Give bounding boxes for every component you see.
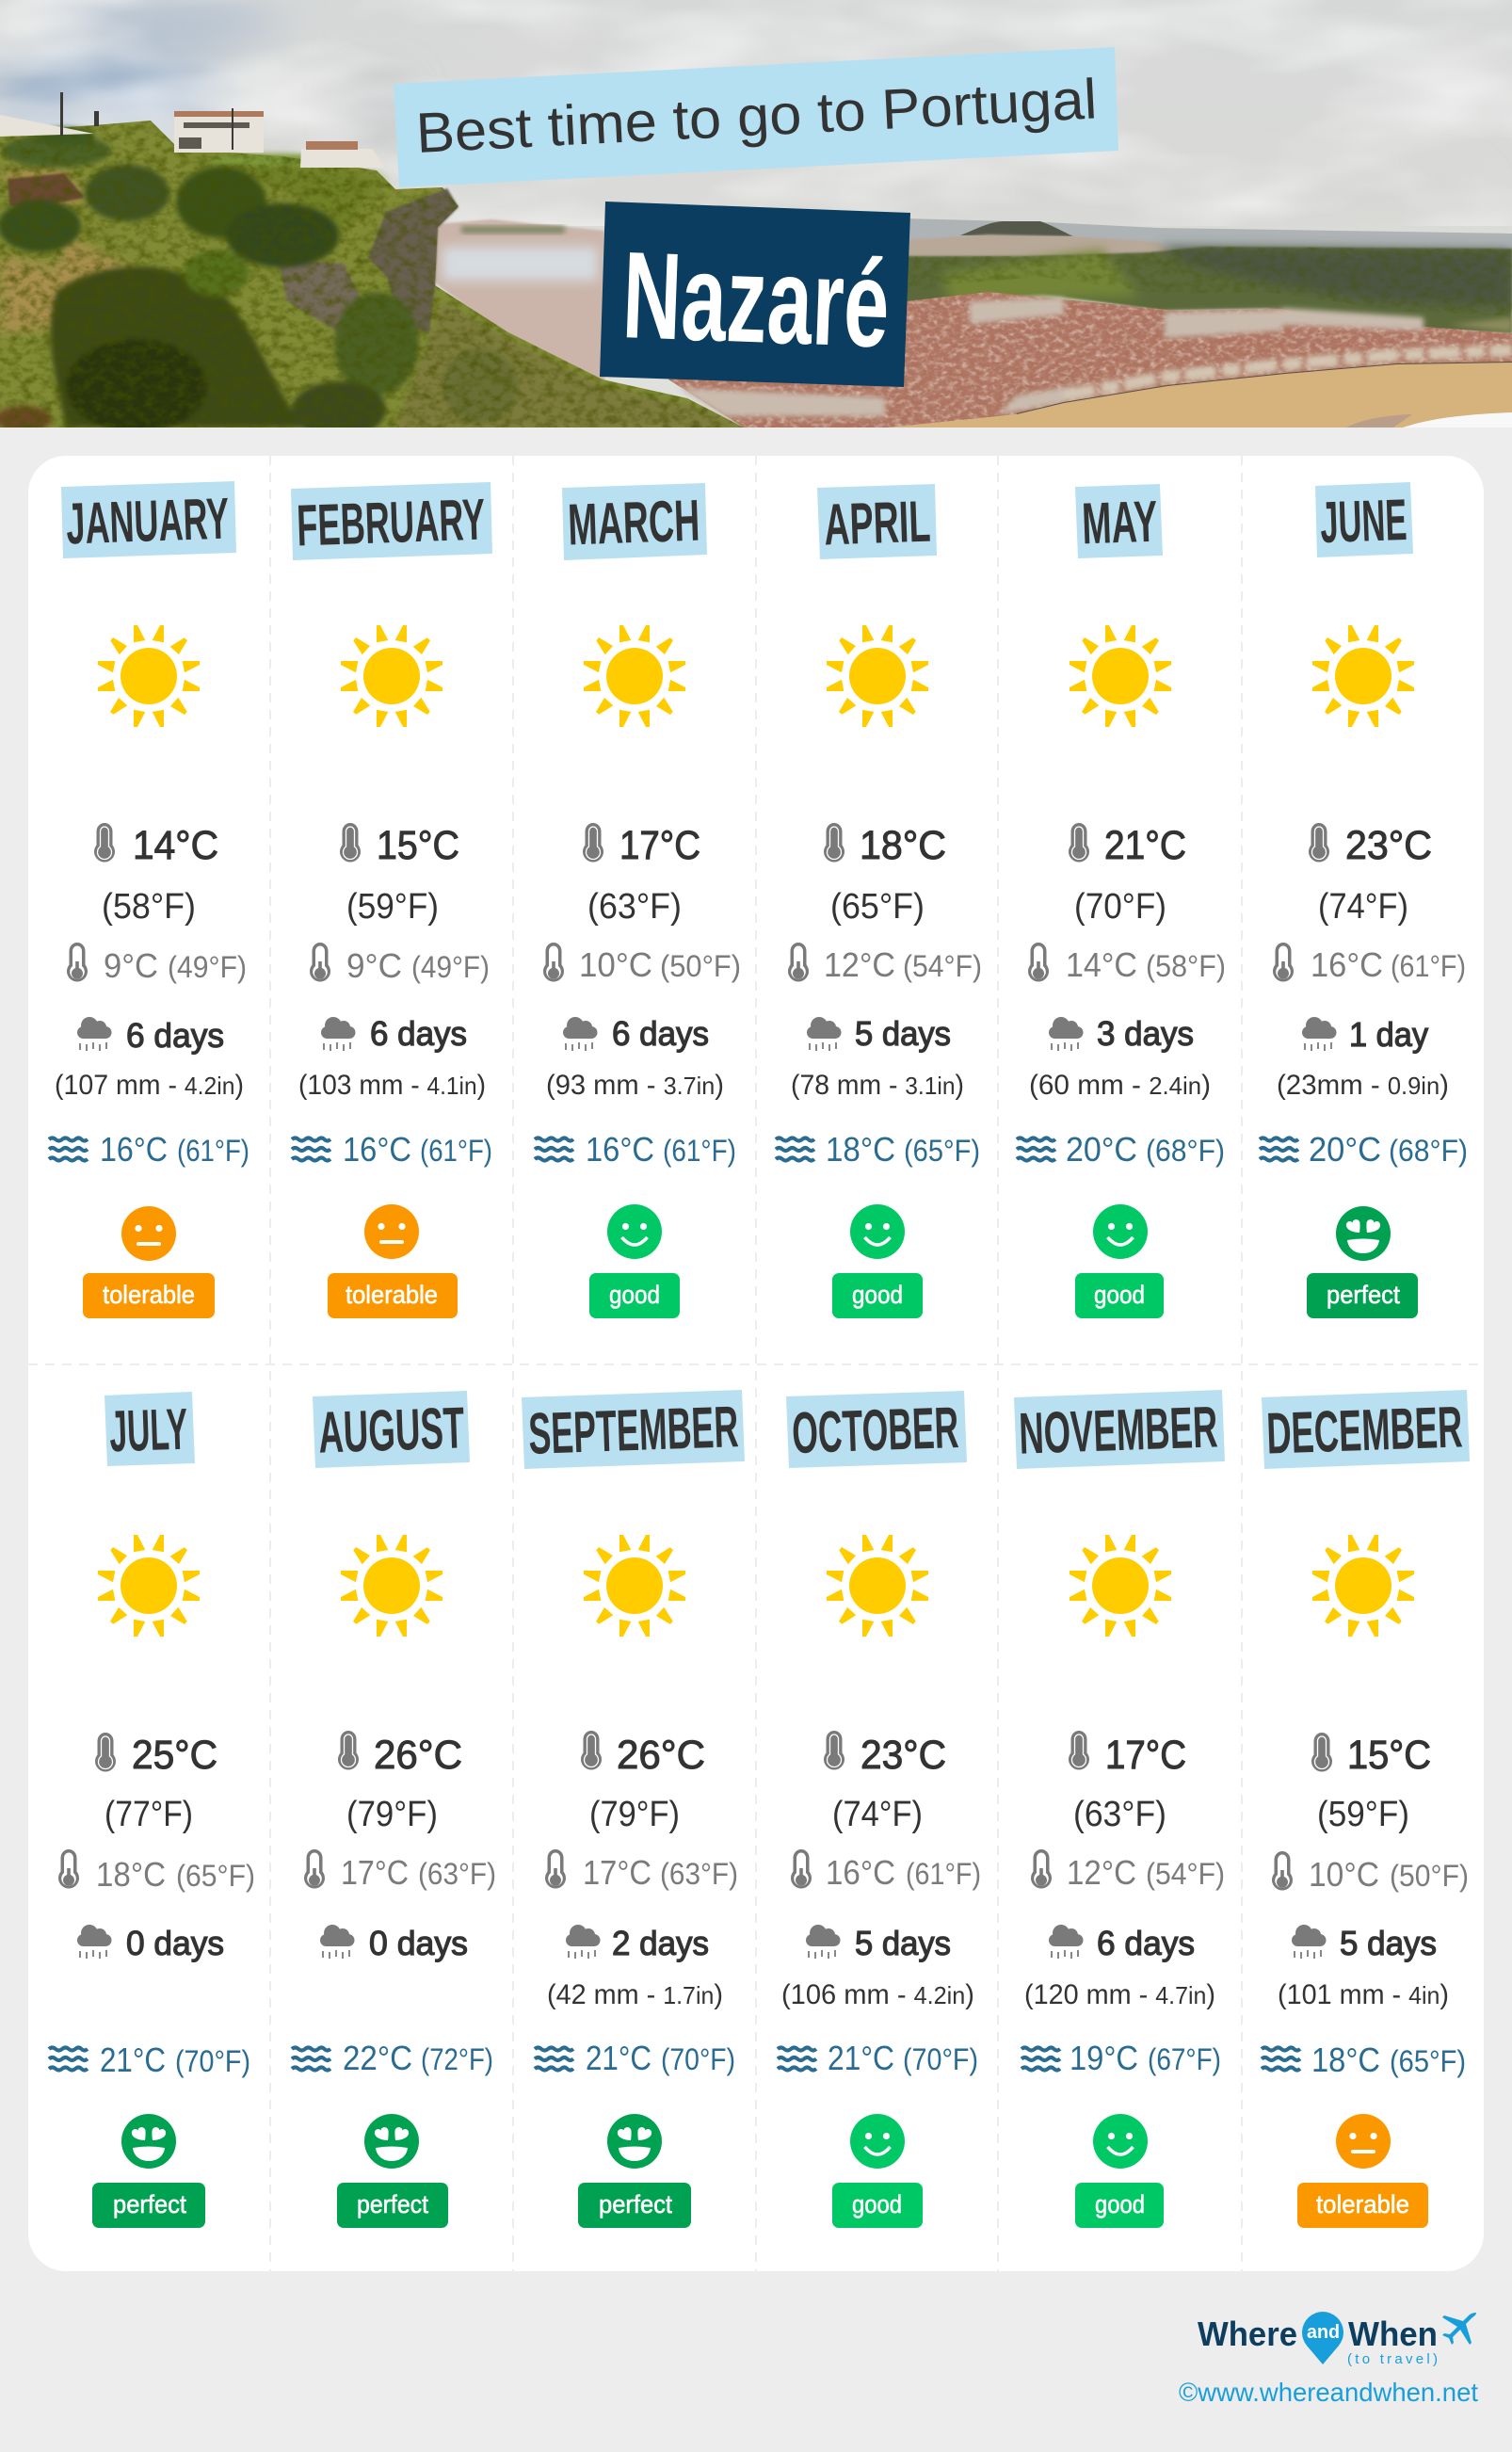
rating badge: tolerable: [328, 1273, 458, 1318]
icon: smiling face: [1093, 2114, 1148, 2169]
rainy days: 1 day: [1349, 1015, 1428, 1054]
rainfall: (78 mm - 3.1in): [791, 1070, 964, 1101]
icon: sun: [827, 1535, 928, 1637]
low temperature: 9°C: [104, 946, 158, 985]
high temperature fahrenheit: (79°F): [346, 1795, 438, 1834]
rainfall: (60 mm - 2.4in): [1029, 1070, 1211, 1101]
sea temperature: 16°C: [343, 1130, 411, 1169]
rainfall: (120 mm - 4.7in): [1024, 1979, 1215, 2010]
icon: thermometer low: [1031, 1849, 1052, 1888]
icon: sea waves: [535, 2047, 573, 2070]
icon: rain cloud: [1302, 1017, 1337, 1051]
month: August: [292, 1391, 496, 2228]
sea temperature: 16°C: [100, 1130, 168, 1169]
icon: rain cloud: [1292, 1925, 1326, 1959]
sea temperature: 21°C: [586, 2039, 651, 2077]
icon: thermometer low: [1273, 943, 1294, 981]
icon: thermometer high: [1069, 1731, 1089, 1769]
low temperature fahrenheit: (54°F): [903, 949, 982, 983]
icon: sea waves: [1260, 1137, 1298, 1160]
low temperature: 16°C: [1311, 945, 1383, 984]
month: September: [522, 1390, 745, 2228]
high temperature: 21°C: [1104, 823, 1186, 868]
rating badge: perfect: perfect: [599, 2190, 672, 2218]
icon: thermometer high: [94, 823, 115, 862]
low temperature fahrenheit: (65°F): [176, 1859, 255, 1893]
logo: Where and When (to travel): Where: [1198, 2315, 1297, 2353]
rating badge: tolerable: [83, 1273, 215, 1318]
low temperature: 18°C: [96, 1855, 166, 1894]
rating badge: tolerable: [1297, 2183, 1428, 2228]
logo: Where and When (to travel): When: [1348, 2315, 1438, 2353]
high temperature: 26°C: [374, 1733, 462, 1778]
title banner: Best time to go to Portugal: [394, 47, 1118, 187]
heading: September: [522, 1390, 745, 1469]
icon: thermometer high: [340, 823, 361, 862]
month: February: [291, 482, 492, 1318]
icon: rain cloud: [1049, 1017, 1083, 1051]
icon: sun: [98, 625, 200, 727]
icon: thermometer high: [1311, 1733, 1332, 1771]
icon: thermometer low: [67, 943, 88, 981]
rainfall: (107 mm - 4.2in): [55, 1070, 244, 1101]
rainfall: (93 mm - 3.7in): [546, 1070, 724, 1101]
icon: sea waves: [776, 1137, 814, 1160]
heading: April: [817, 484, 937, 559]
low temperature: 9°C: [346, 946, 402, 985]
high temperature: 17°C: [619, 823, 700, 868]
vegetation mottling: [0, 121, 744, 427]
icon: thermometer high: [583, 823, 603, 862]
heading: January: JANUARY: [65, 487, 230, 557]
heading: January: [61, 481, 236, 558]
month: June: [1260, 482, 1468, 1318]
icon: thermometer high: [581, 1731, 602, 1769]
icon: rain cloud: [563, 1017, 597, 1051]
icon: sun: [98, 1535, 200, 1637]
icon: sun: [1312, 625, 1414, 727]
sea temperature fahrenheit: (61°F): [420, 1134, 492, 1168]
sea temperature: 16°C: [586, 1130, 654, 1169]
high temperature fahrenheit: (58°F): [102, 887, 196, 927]
rainy days: 5 days: [1340, 1924, 1437, 1962]
rating badge: good: good: [1094, 1281, 1145, 1309]
sea temperature: 21°C: [828, 2039, 894, 2077]
rating badge: perfect: [578, 2183, 691, 2228]
icon: thermometer low: [58, 1849, 79, 1888]
icon: rain cloud: [566, 1925, 601, 1959]
low temperature fahrenheit: (63°F): [418, 1857, 496, 1891]
icon: thermometer high: [824, 1731, 844, 1769]
month: April: [776, 484, 982, 1318]
icon: rain cloud: [1049, 1925, 1083, 1959]
heading: June: [1315, 482, 1413, 557]
rainy days: 0 days: [126, 1924, 224, 1962]
icon: thermometer low: [543, 943, 564, 981]
heading: September: SEPTEMBER: [527, 1395, 739, 1467]
icon: rain cloud: [77, 1017, 111, 1051]
sea temperature fahrenheit: (70°F): [661, 2042, 735, 2076]
icon: sun: [341, 625, 442, 727]
low temperature: 16°C: [826, 1853, 895, 1892]
icon: neutral face: [364, 1204, 419, 1259]
heading: May: [1075, 484, 1163, 558]
icon: thermometer low: [791, 1849, 812, 1888]
icon: sea waves: [292, 1137, 330, 1160]
icon: thermometer low: [304, 1849, 325, 1888]
icon: rain cloud: [806, 1925, 840, 1959]
bushes: [0, 127, 518, 438]
high temperature: 25°C: [132, 1733, 217, 1778]
low temperature: 10°C: [579, 945, 652, 984]
logo: Where and When (to travel): and: [1307, 2322, 1340, 2343]
low temperature fahrenheit: (61°F): [906, 1857, 981, 1891]
high temperature fahrenheit: (74°F): [832, 1795, 923, 1834]
sea temperature fahrenheit: (68°F): [1146, 1134, 1225, 1168]
logo: Where and When (to travel): [1198, 2312, 1476, 2367]
icon: thermometer low: [1272, 1851, 1293, 1890]
icon: sun: [827, 625, 928, 727]
heading: June: JUNE: [1319, 488, 1407, 556]
month: March: [535, 483, 741, 1318]
rating badge: perfect: perfect: [357, 2190, 428, 2218]
icon: rain cloud: [321, 1017, 356, 1051]
icon: heart-eyes face: [364, 2114, 419, 2169]
high temperature fahrenheit: (63°F): [1073, 1795, 1166, 1834]
rainy days: 6 days: [126, 1016, 224, 1055]
rating badge: perfect: perfect: [1327, 1281, 1400, 1309]
sea temperature fahrenheit: (70°F): [175, 2044, 250, 2078]
rainfall: (101 mm - 4in): [1278, 1979, 1449, 2010]
high temperature fahrenheit: (59°F): [1317, 1795, 1409, 1834]
sea temperature: 21°C: [100, 2041, 166, 2079]
title banner: Best time to go to Portugal: Best time to go to Portugal: [414, 67, 1099, 165]
low temperature: 10°C: [1309, 1855, 1379, 1894]
high temperature fahrenheit: (70°F): [1074, 887, 1166, 927]
heading: March: [562, 483, 707, 560]
rainy days: 5 days: [855, 1014, 951, 1053]
high temperature: 15°C: [1347, 1733, 1431, 1778]
website credit: ©www.whereandwhen.net: [1179, 2378, 1478, 2407]
rainy days: 0 days: [369, 1924, 468, 1962]
sea temperature fahrenheit: (61°F): [663, 1134, 736, 1168]
sea temperature: 22°C: [343, 2039, 412, 2077]
low temperature: 17°C: [583, 1853, 651, 1892]
rating badge: good: good: [1095, 2190, 1145, 2218]
icon: thermometer high: [338, 1731, 359, 1769]
rating badge: good: [1075, 1273, 1164, 1318]
cliff grass: [0, 121, 744, 427]
high temperature fahrenheit: (63°F): [587, 887, 682, 927]
rating badge: good: [1075, 2183, 1164, 2228]
far hills: [904, 218, 1512, 262]
icon: heart-eyes face: [607, 2114, 662, 2169]
icon: thermometer high: [1309, 823, 1329, 862]
rating badge: tolerable: tolerable: [1316, 2190, 1409, 2218]
low temperature fahrenheit: (54°F): [1146, 1857, 1225, 1891]
icon: sun: [1312, 1535, 1414, 1637]
icon: heart-eyes face: [121, 2114, 176, 2169]
city banner: Nazaré: [600, 202, 910, 387]
heading: August: [313, 1391, 470, 1468]
heading: April: APRIL: [823, 490, 931, 557]
rating badge: perfect: [1307, 1273, 1418, 1318]
icon: sea waves: [535, 1137, 573, 1160]
rating badge: good: good: [852, 2190, 902, 2218]
rating badge: perfect: [92, 2183, 205, 2228]
sea temperature fahrenheit: (61°F): [177, 1134, 249, 1168]
town roofs: [668, 292, 1512, 427]
low temperature fahrenheit: (58°F): [1146, 949, 1226, 983]
icon: sun: [341, 1535, 442, 1637]
high temperature fahrenheit: (59°F): [346, 887, 439, 927]
rating badge: perfect: [337, 2183, 448, 2228]
sea temperature fahrenheit: (70°F): [903, 2042, 978, 2076]
rainy days: 6 days: [1097, 1924, 1195, 1962]
low temperature fahrenheit: (50°F): [1390, 1859, 1469, 1893]
rainy days: 3 days: [1097, 1014, 1194, 1053]
icon: thermometer high: [95, 1733, 116, 1771]
icon: smiling face: [607, 1204, 662, 1259]
green hill: [904, 247, 1512, 333]
month: July: [49, 1392, 255, 2228]
high temperature: 14°C: [133, 823, 218, 868]
icon: rain cloud: [807, 1017, 842, 1051]
high temperature: 15°C: [377, 823, 459, 868]
low temperature fahrenheit: (49°F): [411, 950, 490, 984]
heading: March: MARCH: [567, 489, 700, 557]
sea temperature: 18°C: [826, 1130, 895, 1169]
icon: thermometer low: [310, 943, 330, 981]
logo: Where and When (to travel): (to travel): [1347, 2351, 1438, 2367]
sea temperature fahrenheit: (67°F): [1148, 2042, 1221, 2076]
heading: November: [1014, 1390, 1225, 1469]
rating badge: perfect: perfect: [113, 2190, 186, 2218]
low temperature fahrenheit: (49°F): [168, 950, 247, 984]
icon: smiling face: [850, 1204, 905, 1259]
heading: August: AUGUST: [317, 1395, 466, 1466]
rainfall: (42 mm - 1.7in): [547, 1979, 723, 2010]
rating badge: tolerable: tolerable: [346, 1281, 438, 1309]
month: December: [1262, 1390, 1470, 2228]
cliff rocks: [368, 188, 458, 333]
rainfall: (106 mm - 4.2in): [781, 1979, 974, 2010]
heading: July: [105, 1392, 195, 1466]
sea temperature fahrenheit: (68°F): [1389, 1134, 1468, 1168]
high temperature fahrenheit: (65°F): [830, 887, 925, 927]
rating badge: good: [832, 1273, 923, 1318]
rainy days: 6 days: [370, 1014, 467, 1053]
heading: November: NOVEMBER: [1018, 1395, 1218, 1467]
rating badge: good: good: [609, 1281, 660, 1309]
town left of the city banner: [435, 219, 604, 395]
rating badge: good: [589, 1273, 680, 1318]
heading: October: [786, 1391, 967, 1468]
icon: thermometer high: [824, 823, 844, 862]
rainy days: 6 days: [612, 1014, 709, 1053]
rainy days: 2 days: [612, 1924, 709, 1962]
month: May: [1017, 484, 1226, 1318]
heading: February: [291, 482, 492, 560]
low temperature: 17°C: [341, 1853, 409, 1892]
high temperature: 17°C: [1105, 1733, 1186, 1778]
icon: sea waves: [1017, 1137, 1055, 1160]
sea temperature fahrenheit: (65°F): [904, 1134, 980, 1168]
sea temperature: 20°C: [1309, 1130, 1381, 1169]
icon: sun: [1070, 1535, 1171, 1637]
low temperature: 12°C: [1067, 1853, 1136, 1892]
icon: sun: [584, 1535, 685, 1637]
rainfall: (103 mm - 4.1in): [298, 1070, 486, 1101]
sea temperature: 19°C: [1070, 2039, 1138, 2077]
icon: sea waves: [778, 2047, 816, 2070]
icon: smiling face: [1093, 1204, 1148, 1259]
high temperature fahrenheit: (74°F): [1318, 887, 1408, 927]
hero photo: Nazaré cliff, town and beach: [0, 0, 1512, 438]
month: October: [778, 1391, 981, 2228]
low temperature fahrenheit: (50°F): [660, 949, 741, 983]
month: November: [1014, 1390, 1225, 2228]
sea temperature fahrenheit: (72°F): [421, 2042, 493, 2076]
heading: July: JULY: [108, 1397, 188, 1464]
high temperature fahrenheit: (79°F): [589, 1795, 680, 1834]
icon: thermometer low: [788, 943, 809, 981]
low temperature: 12°C: [824, 945, 895, 984]
icon: sun: [584, 625, 685, 727]
rating badge: tolerable: tolerable: [103, 1281, 195, 1309]
sea temperature fahrenheit: (65°F): [1390, 2044, 1466, 2078]
icon: heart-eyes face: [1336, 1206, 1391, 1261]
upper town: [909, 234, 1169, 256]
beach: [889, 363, 1512, 427]
icon: rain cloud: [77, 1925, 111, 1959]
icon: sea waves: [49, 2047, 88, 2070]
icon: thermometer low: [545, 1849, 566, 1888]
icon: sea waves: [49, 1137, 88, 1160]
rainy days: 5 days: [855, 1924, 951, 1962]
city banner: Nazaré: Nazaré: [620, 225, 892, 373]
low temperature fahrenheit: (63°F): [660, 1857, 738, 1891]
icon: sea waves: [292, 2047, 330, 2070]
heading: October: OCTOBER: [791, 1395, 959, 1466]
icon: sea waves: [1262, 2047, 1300, 2070]
rainfall: (23mm - 0.9in): [1277, 1070, 1449, 1101]
panel: monthly climate card: [28, 456, 1484, 2271]
high temperature: 23°C: [1345, 823, 1432, 868]
low temperature fahrenheit: (61°F): [1391, 949, 1466, 983]
heading: February: FEBRUARY: [296, 488, 486, 558]
hilltop buildings: [0, 115, 385, 168]
high temperature: 23°C: [861, 1733, 946, 1778]
icon: thermometer low: [1028, 943, 1049, 981]
high temperature: 18°C: [860, 823, 946, 868]
icon: sea waves: [1021, 2047, 1060, 2070]
sea temperature: 18°C: [1311, 2041, 1380, 2079]
icon: neutral face: [121, 1206, 176, 1261]
heading: May: MAY: [1081, 490, 1158, 557]
high temperature: 26°C: [617, 1733, 705, 1778]
icon: sun: [1070, 625, 1171, 727]
low temperature: 14°C: [1066, 945, 1137, 984]
town buildings: [678, 298, 1512, 416]
rating badge: good: [832, 2183, 923, 2228]
icon: neutral face: [1336, 2114, 1391, 2169]
icon: rain cloud: [320, 1925, 354, 1959]
sea temperature: 20°C: [1066, 1130, 1137, 1169]
high temperature fahrenheit: (77°F): [105, 1795, 193, 1834]
month: January: [49, 481, 249, 1318]
rating badge: good: good: [852, 1281, 903, 1309]
icon: smiling face: [850, 2114, 905, 2169]
icon: thermometer high: [1069, 823, 1089, 862]
